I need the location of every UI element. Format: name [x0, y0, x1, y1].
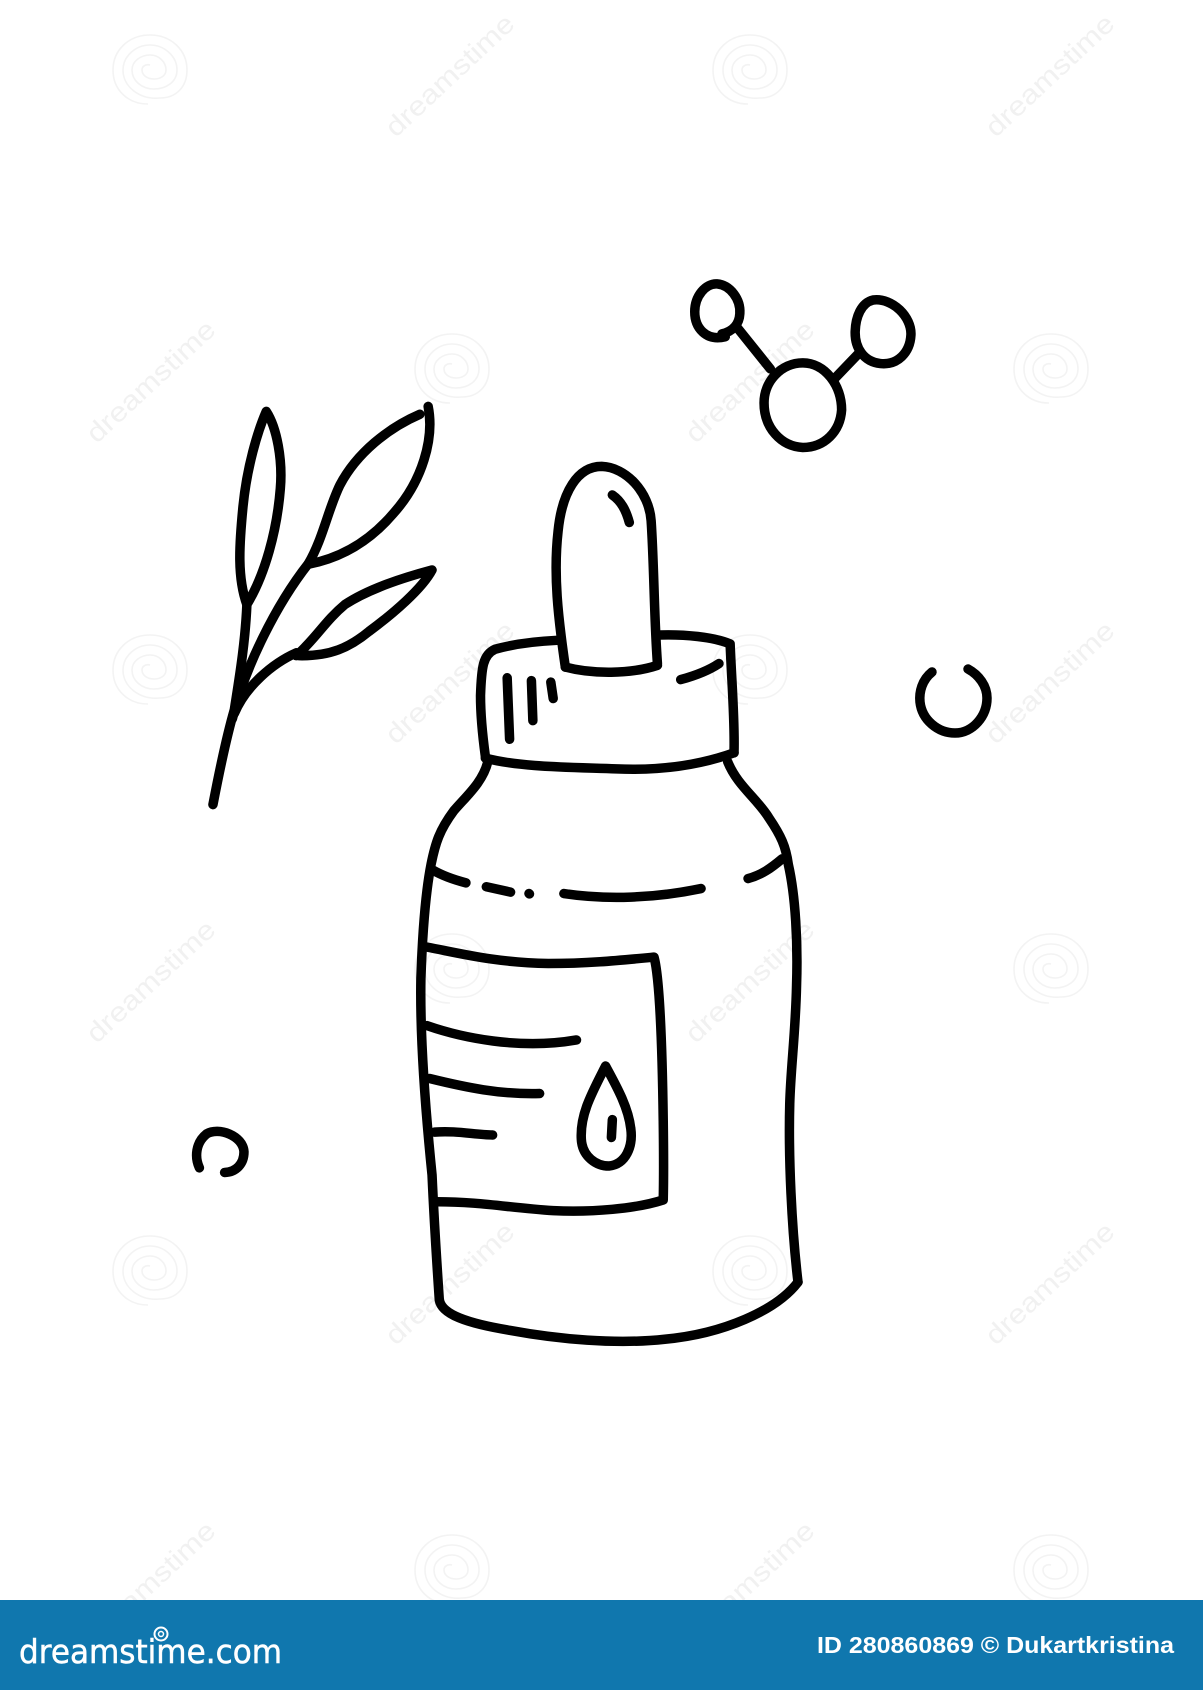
- image ID and credit: ID 280860869 © Dukartkristina: [817, 1632, 1174, 1658]
- bottle cap: [481, 635, 734, 769]
- icon: open ring, right: [920, 669, 987, 733]
- text: dreamstime: [379, 8, 520, 143]
- text: dreamstime: [80, 314, 221, 449]
- bottle label: [427, 947, 664, 1211]
- text: dreamstime: [679, 914, 820, 1049]
- dropper bulb: [556, 466, 657, 672]
- icon: plant sprig: [213, 406, 432, 805]
- footer bar: [0, 1600, 1203, 1690]
- bottle body: [421, 762, 798, 1341]
- text: dreamstime: [80, 914, 221, 1049]
- text: dreamstime: [979, 1216, 1120, 1351]
- text: dreamstime: [679, 1515, 820, 1650]
- text: dreamstime: [80, 1515, 221, 1650]
- icon: small open ring, lower left: [197, 1131, 244, 1172]
- text: dreamstime: [379, 615, 520, 750]
- text: dreamstime: [979, 615, 1120, 750]
- text: dreamstime: [679, 314, 820, 449]
- icon: molecule: [695, 284, 911, 447]
- icon: dropper bottle: [421, 466, 798, 1341]
- text: dreamstime: [379, 1216, 520, 1351]
- dreamstime logo: dreamstime.com: [19, 1632, 282, 1671]
- text: dreamstime: [979, 8, 1120, 143]
- icon: water drop on label: [581, 1066, 631, 1166]
